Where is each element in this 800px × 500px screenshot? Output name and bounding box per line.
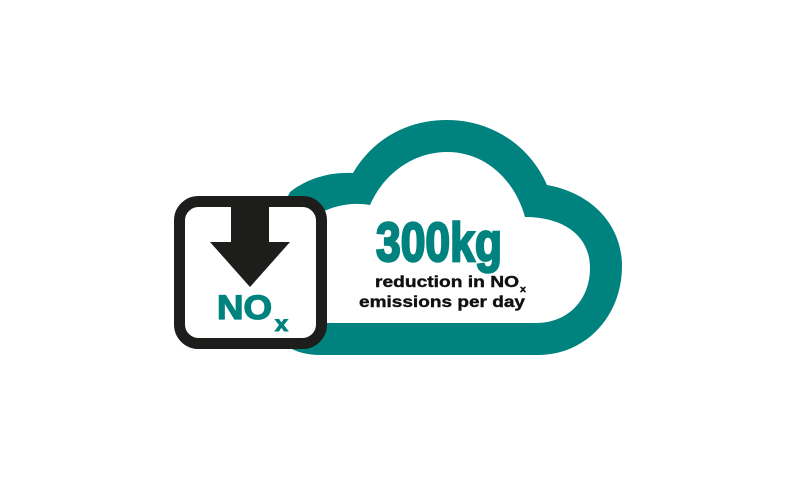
caption: reduction in NOx emissions per day: x bbox=[520, 284, 526, 294]
icon: teal cloud outline bbox=[250, 120, 622, 355]
caption: reduction in NOx emissions per day: emissions per day bbox=[359, 294, 525, 311]
box frame bbox=[180, 202, 322, 344]
icon: down arrow bbox=[210, 207, 290, 287]
NOx label: x bbox=[275, 313, 288, 336]
icon: NOx reduction box bbox=[180, 202, 322, 344]
NOx label bbox=[217, 289, 288, 336]
headline: 300kg: 300kg bbox=[376, 211, 502, 273]
NOx label: NO bbox=[217, 289, 272, 327]
caption: reduction in NOx emissions per day: reduction in NO bbox=[375, 274, 519, 291]
caption: reduction in NOx emissions per day bbox=[359, 274, 526, 311]
